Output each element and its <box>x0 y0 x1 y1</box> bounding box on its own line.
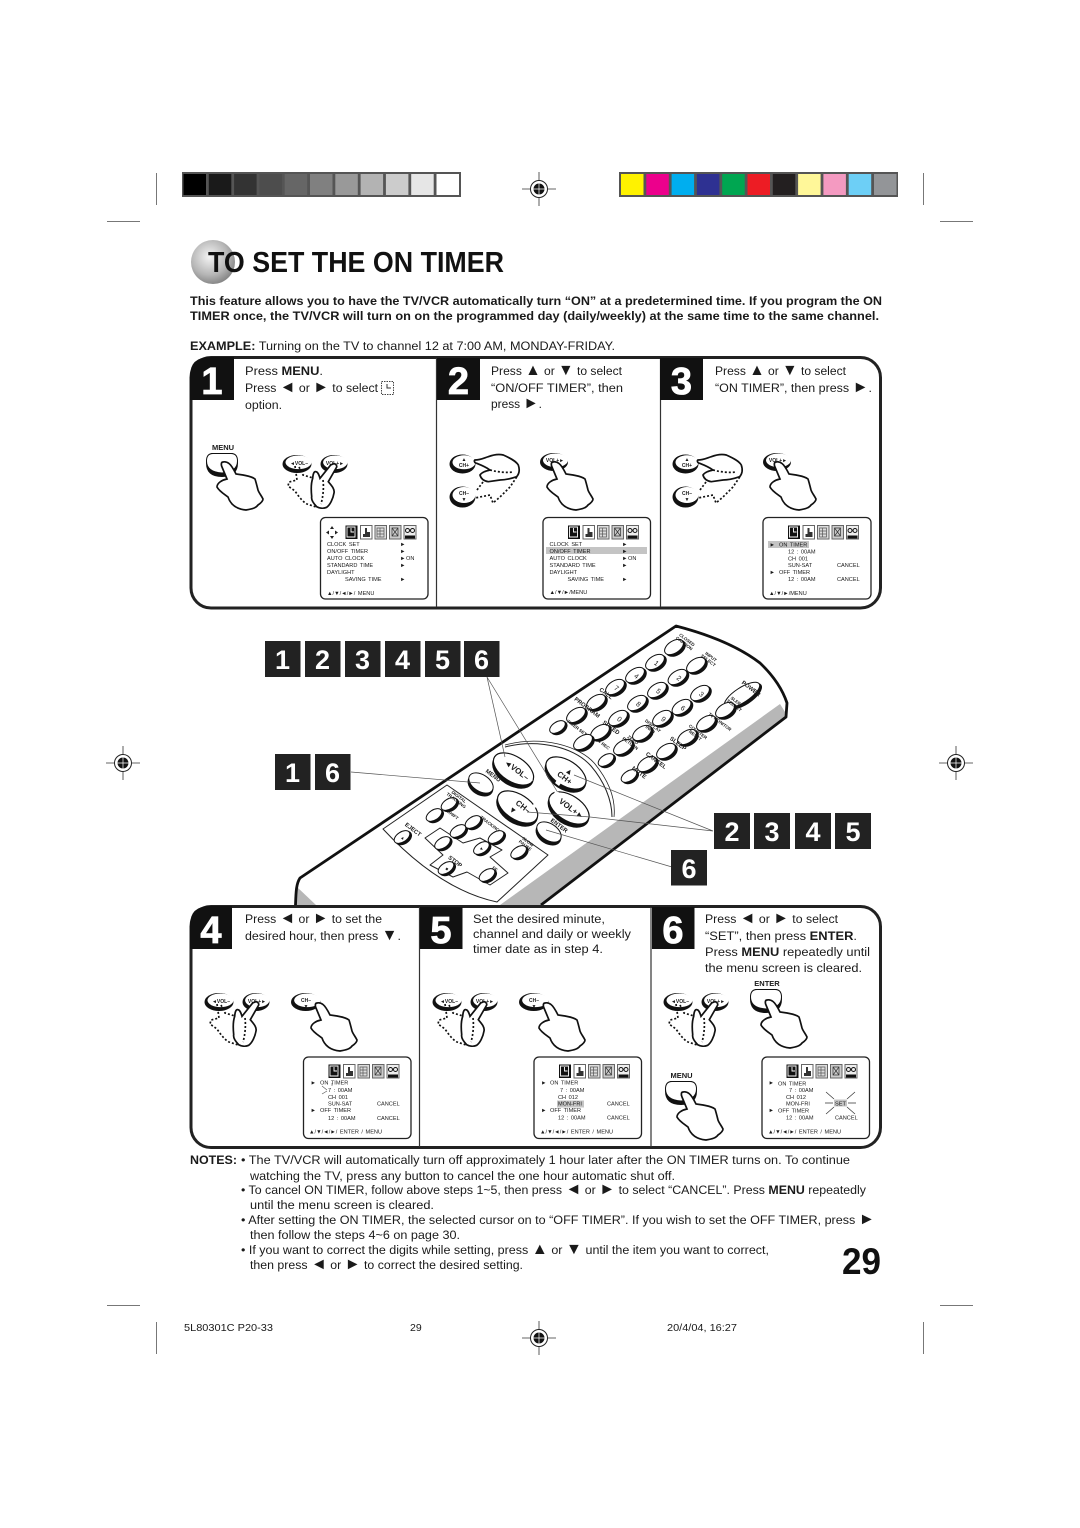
number keypad and function buttons: 9 <box>659 716 667 724</box>
on-screen menu: ON TIMER: CANCEL <box>837 563 860 569</box>
number keypad and function buttons: 8 <box>634 701 642 709</box>
on-screen menu: ON TIMER: CANCEL <box>837 577 860 583</box>
leader lines <box>351 677 713 867</box>
icon: press VOL buttons: ◄VOL– <box>440 999 458 1005</box>
number keypad and function buttons: INFO <box>644 724 656 735</box>
step number 2: 2 <box>448 361 469 403</box>
on-screen menu: clock options with ON/OFF TIMER highlighted <box>543 518 650 599</box>
panel: steps 1 to 3 <box>190 357 880 608</box>
on-screen menu: ON TIMER: SUN-SAT <box>788 563 813 569</box>
icon: press ENTER <box>750 979 807 1048</box>
volume, channel, menu and enter buttons: CH+ <box>555 770 574 787</box>
notes: until the menu screen is cleared. <box>250 1198 434 1212</box>
step 1 text: Press ◄ or ► to select <box>245 379 379 396</box>
title: TO SET THE ON TIMER <box>208 247 504 279</box>
number keypad and function buttons: 4 <box>632 673 640 681</box>
number keypad and function buttons: TIMER SET <box>566 719 588 737</box>
on-screen menu: set minute, channel and date: ON TIMER <box>550 1080 578 1086</box>
step labels: 1 2 3 4 5 6: 5 <box>435 645 450 675</box>
icon: press CH- <box>519 993 585 1051</box>
icon: press CH buttons: CH+ <box>682 463 692 469</box>
VCR transport section: ▲ <box>400 834 406 841</box>
on-screen menu: set minute, channel and date: ▲/▼/◄/►/ ENTER / MENU <box>540 1130 613 1136</box>
on-screen menu: clock options: DAYLIGHT <box>327 570 355 576</box>
on-screen menu: SET highlighted: 7 : 00AM <box>789 1088 814 1094</box>
colour calibration bar <box>619 172 898 197</box>
icon: press CH buttons: CH– <box>459 491 469 497</box>
step number 1: 1 <box>201 361 223 403</box>
on-screen menu: set minute, channel and date: ► <box>541 1080 547 1086</box>
step 2 text: “ON/OFF TIMER”, then <box>491 381 623 395</box>
icon: press CH-: ▼ <box>304 1004 308 1010</box>
on-screen menu: clock options with ON/OFF TIMER highlighted: STANDARD TIME <box>550 563 596 569</box>
number keypad and function buttons: ● REC <box>597 739 611 751</box>
number keypad and function buttons: CALL <box>598 687 614 702</box>
step labels: 1 6: 6 <box>325 758 340 788</box>
on-screen menu: set minute, channel and date: OFF TIMER <box>550 1108 581 1114</box>
on-screen menu: set minute, channel and date: 12 : 00AM <box>558 1116 586 1122</box>
step 4 text: Press ◄ or ► to set the <box>245 910 382 927</box>
on-screen menu: set hour: CANCEL <box>377 1102 400 1108</box>
on-screen menu: ON TIMER: CH 001 <box>788 556 808 562</box>
step labels: 1 2 3 4 5 6: 2 <box>315 645 330 675</box>
on-screen menu: ON TIMER: ON TIMER <box>779 542 807 548</box>
print footer <box>184 1322 737 1334</box>
on-screen menu: set hour: 7 : 00AM <box>328 1088 353 1094</box>
volume, channel, menu and enter buttons: MENU <box>484 769 501 784</box>
volume, channel, menu and enter buttons: ▲ <box>563 766 575 778</box>
step 5 text: timer date as in step 4. <box>473 942 603 956</box>
number keypad and function buttons: RETURN <box>621 736 639 751</box>
number keypad and function buttons: ZERO <box>627 734 640 746</box>
on-screen menu: clock options with ON/OFF TIMER highlighted: ► <box>622 542 628 548</box>
step 3 text: “ON TIMER”, then press ►. <box>715 379 872 396</box>
on-screen menu: ON TIMER: OFF TIMER <box>779 570 810 576</box>
step 5 text: Set the desired minute, <box>473 912 605 926</box>
on-screen menu: set hour: SUN-SAT <box>328 1102 353 1108</box>
on-screen menu: SET highlighted: OFF TIMER <box>778 1108 809 1114</box>
on-screen menu: clock options: STANDARD TIME <box>327 563 373 569</box>
on-screen menu: clock options with ON/OFF TIMER highlighted: ON <box>628 556 636 562</box>
on-screen menu: clock options with ON/OFF TIMER highlighted: ► <box>622 549 628 555</box>
step number 3 <box>660 358 703 403</box>
icon: press VOL buttons: ◄VOL– <box>212 999 230 1005</box>
number keypad and function buttons <box>505 632 766 817</box>
icon: press MENU <box>665 1071 723 1140</box>
icon: press CH-: ▼ <box>532 1004 536 1010</box>
step number 2 <box>437 358 480 403</box>
on-screen menu: set hour: ► <box>310 1108 316 1114</box>
on-screen menu: set hour: CANCEL <box>377 1116 400 1122</box>
icon: press VOL buttons: ◄VOL– <box>290 461 308 467</box>
VCR transport section: EJECT <box>403 822 422 838</box>
VCR transport section <box>383 785 548 902</box>
on-screen menu: SET highlighted: ► <box>768 1108 774 1114</box>
step labels: 1 2 3 4 5 6: 4 <box>395 645 410 675</box>
number keypad and function buttons: CAPTION <box>675 635 694 651</box>
on-screen menu: clock options: ► <box>400 563 406 569</box>
step number 5 <box>420 907 462 952</box>
volume, channel, menu and enter buttons <box>463 746 596 850</box>
step number 4 <box>190 906 232 952</box>
on-screen menu: set minute, channel and date <box>534 1057 642 1138</box>
on-screen menu: SET highlighted: SET <box>835 1102 846 1108</box>
icon: press VOL buttons: VOL+► <box>707 999 725 1005</box>
notes: watching the TV, press any button to cancel the one hour automatic shut off. <box>249 1169 675 1183</box>
VCR transport section: SLOW <box>521 836 535 848</box>
VCR transport section: SHIFT <box>446 809 460 821</box>
icon: press CH buttons: CH+ <box>459 463 469 469</box>
grayscale calibration bar <box>182 172 461 197</box>
notes: • If you want to correct the digits while setting, press ▲ or ▼ until the item you want to correct, <box>241 1241 769 1258</box>
step 6 text: Press MENU repeatedly until <box>705 945 870 959</box>
print footer: 5L80301C P20-33 <box>184 1322 273 1334</box>
on-screen menu: clock options: ► <box>400 577 406 583</box>
example line: EXAMPLE: Turning on the TV to channel 12 at 7:00 AM, MONDAY-FRIDAY. <box>190 339 615 353</box>
on-screen menu: clock options: ► <box>400 556 406 562</box>
on-screen menu: ON TIMER: 12 : 00AM <box>788 577 816 583</box>
on-screen menu: clock options with ON/OFF TIMER highlighted: ► <box>622 563 628 569</box>
icon: press VOL buttons: VOL+► <box>248 999 266 1005</box>
on-screen menu: set minute, channel and date: ► <box>541 1108 547 1114</box>
icon: press VOL buttons: VOL+► <box>326 461 344 467</box>
VCR transport section: DIGITAL <box>451 790 468 804</box>
step 3 text <box>715 362 872 396</box>
icon: press ENTER: ENTER <box>754 979 780 988</box>
icon: press MENU <box>206 443 263 510</box>
VCR transport section: ■ <box>444 866 450 872</box>
step 1 <box>190 357 428 599</box>
number keypad and function buttons: SLEEP <box>730 695 744 708</box>
on-screen menu: SET highlighted: ► <box>768 1080 774 1086</box>
step 5 text <box>473 912 632 956</box>
step number 4: 4 <box>200 910 222 952</box>
icon: press MENU: MENU <box>670 1071 693 1080</box>
volume, channel, menu and enter buttons: ENTER <box>549 818 569 835</box>
notes: • After setting the ON TIMER, the selected cursor on to “OFF TIMER”. If you wish to set the OFF TIMER, press ► <box>241 1211 875 1228</box>
on-screen menu: set minute, channel and date: 7 : 00AM <box>560 1088 585 1094</box>
on-screen menu: clock options with ON/OFF TIMER highlighted: ► <box>622 577 628 583</box>
step number 1 <box>190 357 234 403</box>
step labels: 2 3 4 5 <box>714 813 871 849</box>
on-screen menu: ON TIMER: 12 : 00AM <box>788 550 816 556</box>
page number: 29 <box>842 1241 881 1282</box>
on-screen menu: clock options: ▲/▼/◄/►/ MENU <box>327 591 374 597</box>
step labels: 1 6 <box>275 754 350 790</box>
step 1 text <box>245 364 394 412</box>
number keypad and function buttons: SELECT <box>700 653 717 668</box>
icon: press CH buttons: ▲ <box>685 457 689 463</box>
volume, channel, menu and enter buttons: VOL+► <box>557 797 586 821</box>
on-screen menu: clock options: AUTO CLOCK <box>327 556 365 562</box>
step number 6 <box>652 907 694 952</box>
number keypad and function buttons: 1 <box>652 660 660 668</box>
step 4 text <box>245 910 401 944</box>
number keypad and function buttons: INPUT <box>704 651 718 663</box>
printer colour calibration and crop marks <box>106 172 973 1355</box>
icon: press VOL buttons <box>664 993 728 1046</box>
step labels: 2 3 4 5: 5 <box>845 817 861 847</box>
step labels: 1 2 3 4 5 6: 1 <box>275 645 290 675</box>
number keypad and function buttons: CANCEL <box>644 752 667 771</box>
remote control illustration <box>265 626 871 905</box>
number keypad and function buttons: PROGRAM <box>573 697 601 720</box>
step 6 text: “SET”, then press ENTER. <box>705 929 857 943</box>
notes: • The TV/VCR will automatically turn off approximately 1 hour later after the ON TIMER turns on. To continue <box>241 1153 850 1167</box>
volume, channel, menu and enter buttons: CH– <box>514 798 532 816</box>
icon: press VOL buttons <box>432 993 498 1046</box>
step 2 text <box>491 362 623 412</box>
on-screen menu: SET highlighted <box>762 1057 870 1138</box>
step labels: 2 3 4 5: 3 <box>764 817 780 847</box>
VCR transport section: STOP <box>447 855 463 869</box>
icon: press CH-: CH– <box>529 998 539 1004</box>
step labels: 2 3 4 5: 2 <box>724 817 740 847</box>
on-screen menu: clock options with ON/OFF TIMER highlighted: ► <box>622 556 628 562</box>
number keypad and function buttons: CLOSED <box>678 632 696 647</box>
on-screen menu: clock options with ON/OFF TIMER highlighted: DAYLIGHT <box>550 570 578 576</box>
step labels: 1 2 3 4 5 6: 6 <box>474 645 489 675</box>
on-screen menu: clock options: ► <box>400 542 406 548</box>
number keypad and function buttons: RESET <box>688 729 703 742</box>
on-screen menu: set minute, channel and date: CANCEL <box>607 1102 630 1108</box>
icon: press VOL+ <box>763 453 816 510</box>
on-screen menu: set hour: OFF TIMER <box>320 1108 351 1114</box>
number keypad and function buttons: DISPLAY <box>644 718 662 733</box>
number keypad and function buttons: 5 <box>654 688 662 696</box>
on-screen menu: clock options: SAVING TIME <box>345 577 382 583</box>
on-screen menu: clock options with ON/OFF TIMER highlighted: ▲/▼/►/MENU <box>550 590 587 596</box>
registration marks <box>106 172 973 1355</box>
step 5 text: channel and daily or weekly <box>473 927 632 941</box>
on-screen menu: set minute, channel and date: MON-FRI <box>558 1102 582 1108</box>
step 6 <box>652 907 870 1140</box>
volume, channel, menu and enter buttons: ◄VOL– <box>502 758 531 783</box>
step labels: 2 3 4 5: 4 <box>805 817 821 847</box>
on-screen menu: set minute, channel and date: CH 012 <box>558 1095 578 1101</box>
on-screen menu: clock options: ON/OFF TIMER <box>327 549 368 555</box>
step 6 text <box>705 910 870 975</box>
on-screen menu: set hour: CH 001 <box>328 1095 348 1101</box>
step 1 text: Press MENU. <box>245 364 323 378</box>
VCR transport section: TRACKING <box>479 815 501 833</box>
icon: press CH buttons: ▼ <box>462 497 466 503</box>
on-screen menu: SET highlighted: 12 : 00AM <box>786 1116 814 1122</box>
on-screen menu: ON TIMER: ► <box>770 542 775 548</box>
on-screen menu: set hour <box>304 1057 411 1138</box>
on-screen menu: set minute, channel and date: CANCEL <box>607 1116 630 1122</box>
icon: press CH buttons: ▲ <box>462 457 466 463</box>
VCR transport section: TRACKING <box>445 791 467 810</box>
on-screen menu: set hour: ▲/▼/◄/►/ ENTER / MENU <box>309 1130 382 1136</box>
on-screen menu: clock options with ON/OFF TIMER highlighted: ON/OFF TIMER <box>550 549 590 555</box>
step 4 text: desired hour, then press ▼. <box>245 927 401 944</box>
step 6 text: Press ◄ or ► to select <box>705 910 839 927</box>
number keypad and function buttons: MUTE <box>630 766 647 781</box>
icon: press CH buttons <box>450 454 519 508</box>
number keypad and function buttons: 2 <box>675 675 682 683</box>
on-screen menu: set hour: ON TIMER <box>320 1080 348 1086</box>
notes: then press ◄ or ► to correct the desired setting. <box>250 1256 523 1273</box>
step labels: 1 2 3 4 5 6 <box>265 641 500 677</box>
intro text <box>190 294 882 323</box>
number keypad and function buttons: POWER <box>740 680 762 699</box>
icon: press VOL buttons <box>282 455 348 508</box>
intro text: This feature allows you to have the TV/VCR automatically turn “ON” at a predetermined time. If you program the ON <box>190 294 882 308</box>
number keypad and function buttons: SPEED <box>601 720 620 737</box>
volume, channel, menu and enter buttons: ▼ <box>507 804 519 816</box>
VCR transport section: PAUSE <box>518 839 533 852</box>
step number 3: 3 <box>671 361 692 403</box>
on-screen menu: clock options with ON/OFF TIMER highlighted: CLOCK SET <box>550 542 583 548</box>
step labels: 1 2 3 4 5 6: 3 <box>355 645 370 675</box>
on-screen menu: clock options with ON/OFF TIMER highlighted: SAVING TIME <box>568 577 604 583</box>
remote body <box>296 626 787 905</box>
icon: press MENU: MENU <box>212 443 234 452</box>
number keypad and function buttons: 6 <box>679 705 686 713</box>
on-screen menu: clock options: CLOCK SET <box>327 542 360 548</box>
number keypad and function buttons: SELECT <box>726 698 743 713</box>
print footer: 20/4/04, 16:27 <box>667 1322 737 1334</box>
title <box>191 240 504 284</box>
on-screen menu: clock options: ► <box>400 549 406 555</box>
on-screen menu: clock options: ON <box>406 556 414 562</box>
number keypad and function buttons: TV MONITOR <box>707 712 733 733</box>
icon: press CH buttons: ▼ <box>685 497 689 503</box>
print footer: 29 <box>410 1322 422 1334</box>
icon: press VOL buttons: ◄VOL– <box>671 999 689 1005</box>
step 2 text: press ►. <box>491 395 542 412</box>
number keypad and function buttons: 7 <box>612 685 620 693</box>
number keypad and function buttons: 3 <box>697 691 705 699</box>
VCR transport section: ► <box>479 845 485 852</box>
step 6 text: the menu screen is cleared. <box>705 961 862 975</box>
step 3 <box>660 358 872 599</box>
icon: press CH-: CH– <box>301 998 311 1004</box>
intro text: TIMER once, the TV/VCR will turn on on the programmed day (daily/weekly) at the same time to the same channel. <box>190 309 879 323</box>
on-screen menu: SET highlighted: ▲/▼/◄/►/ ENTER / MENU <box>768 1130 841 1136</box>
step 4 <box>190 906 411 1138</box>
on-screen menu: set hour: 12 : 00AM <box>328 1116 356 1122</box>
step number 5: 5 <box>430 910 452 952</box>
on-screen menu: SET highlighted: CH 012 <box>786 1095 806 1101</box>
number keypad and function buttons: SLEEP <box>668 736 687 752</box>
on-screen menu: set hour: ► <box>310 1080 316 1086</box>
notes: then follow the steps 4~6 on page 30. <box>250 1228 460 1242</box>
step number 6: 6 <box>662 910 684 952</box>
number keypad and function buttons: 0 <box>615 716 623 724</box>
on-screen menu: SET highlighted: ON TIMER <box>778 1082 806 1088</box>
on-screen menu: ON TIMER: ► <box>770 570 775 576</box>
icon: press CH- <box>291 993 357 1051</box>
VCR transport section: FF <box>491 865 499 873</box>
icon: press VOL+ <box>540 453 593 510</box>
step 5 <box>420 907 642 1138</box>
on-screen menu: clock options <box>320 518 428 599</box>
icon: press VOL+: VOL+► <box>769 458 787 464</box>
step labels: 1 6: 1 <box>285 758 300 788</box>
step 1 text: option. <box>245 398 282 412</box>
icon: press VOL+: VOL+► <box>546 458 564 464</box>
icon: press CH buttons <box>672 454 742 508</box>
panel: steps 4 to 6 <box>190 906 880 1148</box>
notes: NOTES: <box>190 1153 237 1167</box>
icon: press CH buttons: CH– <box>682 491 692 497</box>
icon: press VOL buttons <box>204 993 270 1046</box>
icon: press VOL buttons: VOL+► <box>476 999 494 1005</box>
on-screen menu: ON TIMER <box>763 518 871 599</box>
step 3 text: Press ▲ or ▼ to select <box>715 362 847 379</box>
on-screen menu: SET highlighted: MON-FRI <box>786 1102 810 1108</box>
step label: 6 <box>671 850 707 886</box>
on-screen menu: ON TIMER: ▲/▼/►/MENU <box>769 591 807 597</box>
number keypad and function buttons: COUNTER <box>688 723 709 741</box>
step 2 text: Press ▲ or ▼ to select <box>491 362 623 379</box>
step label: 6: 6 <box>681 854 697 884</box>
step 2 <box>437 358 650 599</box>
notes: • To cancel ON TIMER, follow above steps 1~5, then press ◄ or ► to select “CANCEL”. Press MENU repeatedly <box>241 1181 867 1198</box>
on-screen menu: clock options with ON/OFF TIMER highlighted: AUTO CLOCK <box>550 556 587 562</box>
on-screen menu: SET highlighted: CANCEL <box>835 1116 858 1122</box>
notes <box>190 1153 875 1273</box>
